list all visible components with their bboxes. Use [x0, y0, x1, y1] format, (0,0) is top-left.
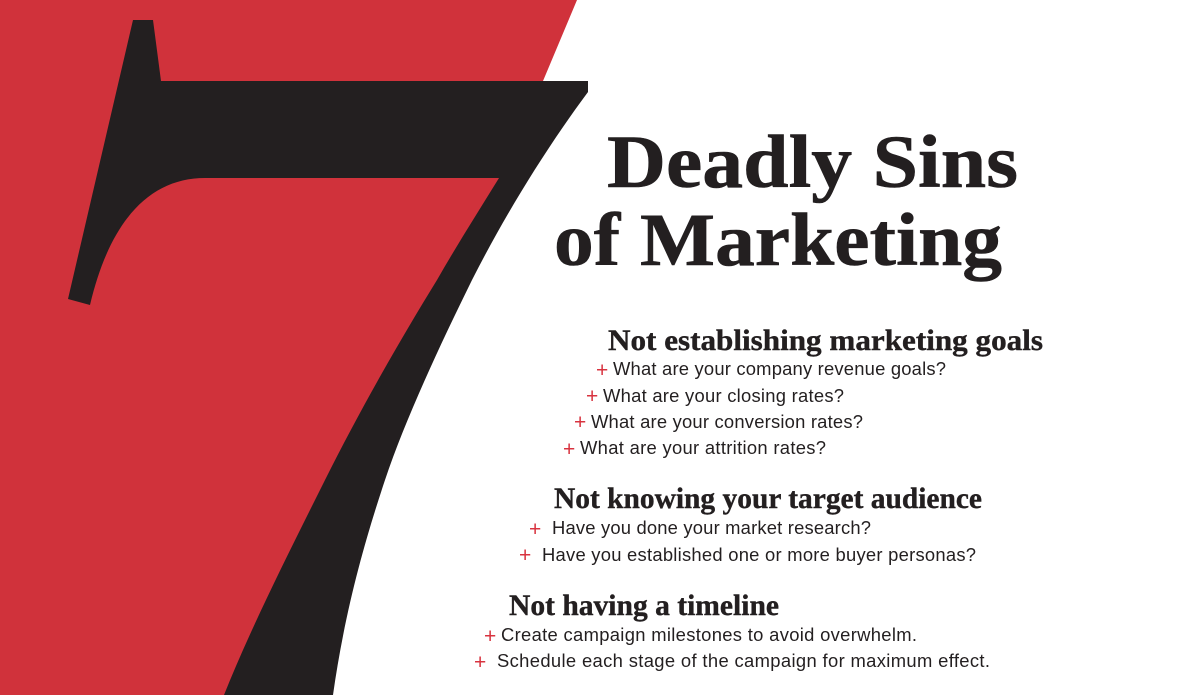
- title: [554, 121, 1018, 282]
- list: goals questions: +: [596, 359, 608, 382]
- list: audience questions: Have you established one or more buyer personas?: [542, 544, 976, 565]
- title: Deadly Sins: [607, 121, 1018, 204]
- list: goals questions: What are your conversion rates?: [591, 411, 863, 432]
- list: audience questions: +: [529, 518, 541, 541]
- list: timeline actions: +: [474, 651, 486, 674]
- list: audience questions: +: [519, 544, 531, 567]
- list: timeline actions: Schedule each stage of the campaign for maximum effect.: [497, 650, 990, 671]
- heading: timeline: Not having a timeline: [509, 589, 779, 622]
- heading: audience: Not knowing your target audience: [554, 482, 982, 515]
- list: timeline actions: Create campaign milestones to avoid overwhelm.: [501, 624, 917, 645]
- list: audience questions: Have you done your market research?: [552, 517, 871, 538]
- list: timeline actions: [474, 624, 990, 674]
- list: timeline actions: +: [484, 625, 496, 648]
- list: goals questions: +: [586, 385, 598, 408]
- list: goals questions: What are your closing rates?: [603, 385, 844, 406]
- list: goals questions: +: [574, 411, 586, 434]
- section: not establishing marketing goals: [563, 324, 1043, 461]
- section: not having a timeline: [474, 589, 990, 674]
- heading: goals: Not establishing marketing goals: [608, 324, 1043, 357]
- panel: red slanted background: [0, 0, 577, 695]
- title: of Marketing: [554, 199, 1002, 282]
- big numeral 7: [68, 20, 588, 695]
- list: audience questions: [519, 517, 976, 567]
- list: goals questions: [563, 358, 946, 461]
- list: goals questions: What are your attrition rates?: [580, 437, 826, 458]
- list: goals questions: +: [563, 438, 575, 461]
- section: not knowing your target audience: [519, 482, 982, 567]
- list: goals questions: What are your company revenue goals?: [613, 358, 946, 379]
